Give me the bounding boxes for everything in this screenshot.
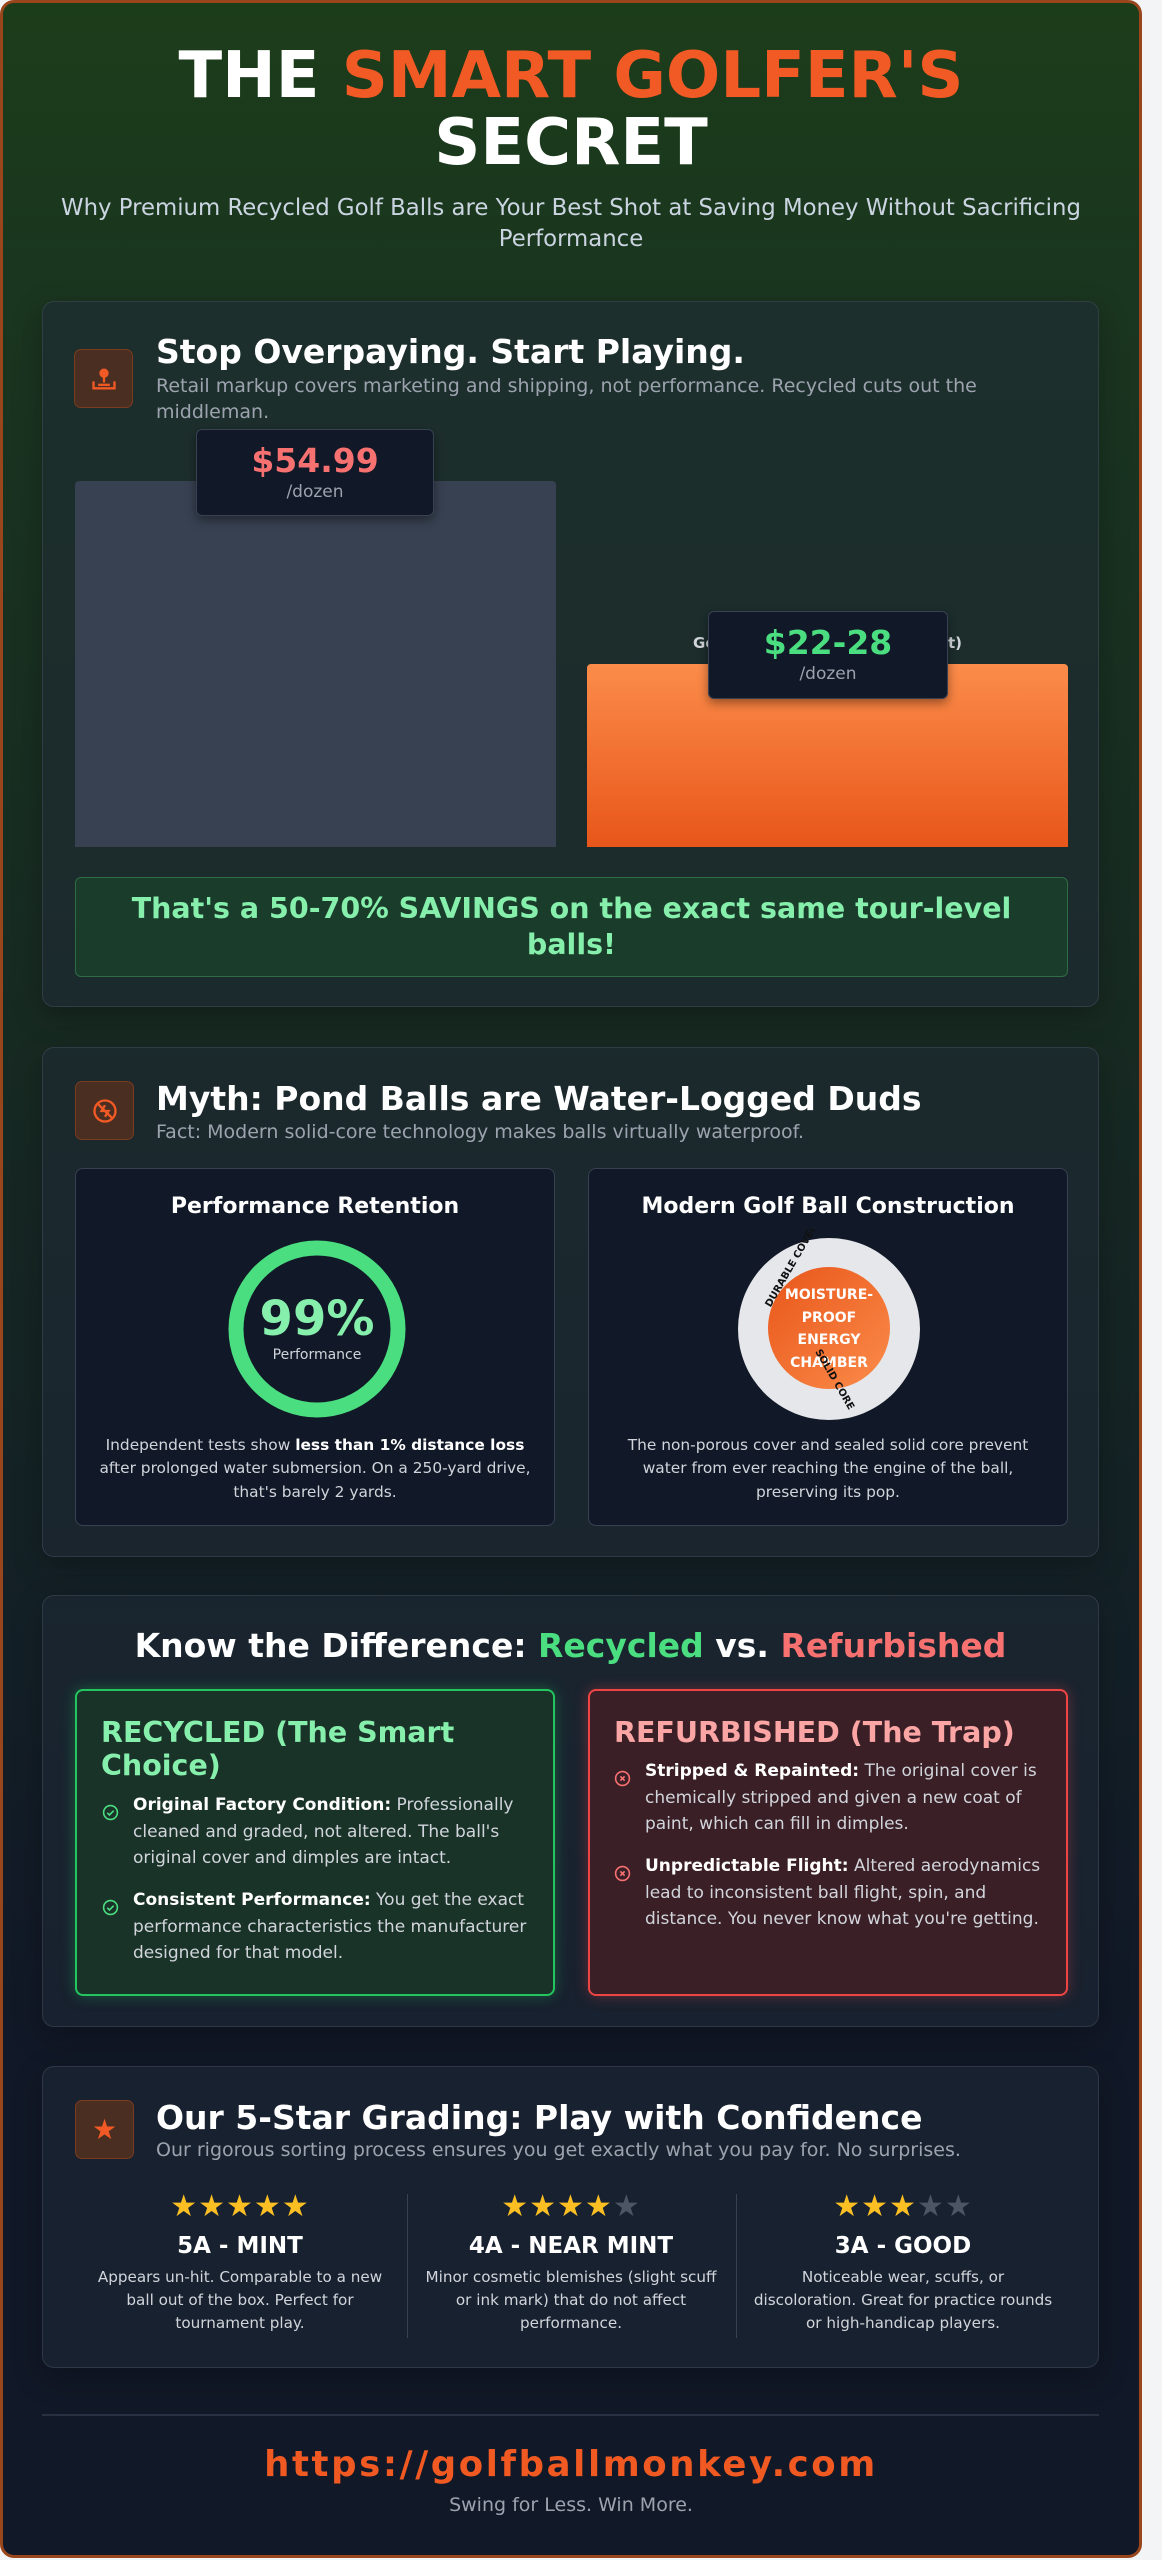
chart: 99% ring [228, 1240, 406, 1418]
footer: tagline: Swing for Less. Win More. [449, 2494, 693, 2516]
icon: star [75, 2100, 134, 2159]
grade: 3A: or high-handicap players. [806, 2314, 1000, 2332]
subheading: middleman. [156, 401, 269, 423]
icon: check [102, 1900, 118, 1916]
grade: 3A: ★★★★★ [833, 2189, 973, 2224]
grade: 3A [754, 2189, 1052, 2332]
card: refurbished [588, 1689, 1068, 1996]
grade: 5A: 5A - MINT [177, 2233, 303, 2259]
grade: 4A: or ink mark) that do not affect [456, 2291, 686, 2309]
title: SECRET [434, 106, 708, 180]
icon: money tray [74, 349, 133, 408]
subheading: Retail markup covers marketing and shipping, not performance. Recycled cuts out the [156, 375, 977, 397]
card: performance retention: after prolonged water submersion. On a 250-yard drive, [100, 1459, 530, 1477]
price tag: recycled: $22-28 [764, 623, 892, 662]
panel: grading [42, 2066, 1099, 2368]
card: ball construction [588, 1168, 1068, 1526]
card: recycled: Consistent Performance: You get the exact [133, 1890, 524, 1910]
icon: x [614, 1770, 630, 1786]
panel: recycled vs refurbished [42, 1595, 1099, 2027]
diagram: golf ball layers: CHAMBER [790, 1355, 868, 1371]
grade: 4A: 4A - NEAR MINT [469, 2233, 673, 2259]
bar label: recycled: GolfBallMonkey (Recycled Mint) [693, 634, 962, 652]
card: refurbished: Stripped & Repainted: The original cover is [645, 1761, 1037, 1781]
subtitle [61, 195, 1081, 252]
card: ball construction: The non-porous cover and sealed solid core prevent [628, 1436, 1028, 1454]
card: refurbished: chemically stripped and given a new coat of [645, 1788, 1022, 1808]
card: refurbished: lead to inconsistent ball flight, spin, and [645, 1882, 986, 1902]
diagram: golf ball layers: MOISTURE- [785, 1287, 873, 1303]
diagram: golf ball layers: ENERGY [798, 1332, 861, 1348]
price tag: retail: /dozen [286, 482, 344, 502]
grade: 5A: ★★★★★ [170, 2189, 310, 2224]
heading: Myth: Pond Balls are Water-Logged Duds [156, 1079, 922, 1118]
subtitle: Why Premium Recycled Golf Balls are Your Best Shot at Saving Money Without Sacrificing [61, 195, 1081, 221]
grade: 5A [98, 2189, 382, 2332]
icon: check [102, 1804, 118, 1820]
bar label: retail: Retail (New) [263, 448, 368, 466]
card: recycled: cleaned and graded, not altered. The ball's [133, 1822, 499, 1842]
grade: 3A: Noticeable wear, scuffs, or [802, 2268, 1004, 2286]
heading: Stop Overpaying. Start Playing. [156, 332, 745, 371]
card: ball construction: preserving its pop. [756, 1483, 900, 1501]
card: recycled: original cover and dimples are intact. [133, 1848, 451, 1868]
card: performance retention [75, 1168, 555, 1526]
chart: 99% ring: 99% [260, 1291, 374, 1347]
subheading: Our rigorous sorting process ensures you get exactly what you pay for. No surprises. [156, 2139, 961, 2161]
card: recycled: RECYCLED (The Smart [101, 1716, 454, 1749]
price tag: retail: $54.99 [251, 441, 379, 480]
chart: 99% ring: Performance [273, 1347, 361, 1363]
grade: 5A: ball out of the box. Perfect for [126, 2291, 354, 2309]
footer: url: https://golfballmonkey.com [264, 2444, 878, 2485]
card: refurbished: distance. You never know what you're getting. [645, 1909, 1039, 1929]
card: refurbished: REFURBISHED (The Trap) [614, 1716, 1015, 1749]
grade: 4A: performance. [520, 2314, 622, 2332]
card: refurbished: Unpredictable Flight: Altered aerodynamics [645, 1856, 1040, 1876]
bar: recycled [587, 664, 1068, 847]
grade: 5A: tournament play. [175, 2314, 305, 2332]
card: performance retention: Independent tests show less than 1% distance loss [106, 1436, 524, 1454]
subheading [156, 375, 977, 423]
subheading: Fact: Modern solid-core technology makes balls virtually waterproof. [156, 1121, 804, 1143]
grade: 4A: ★★★★★ [501, 2189, 641, 2224]
card: recycled: designed for that model. [133, 1943, 343, 1963]
icon: star: ★ [92, 2113, 117, 2146]
grade: 3A: discoloration. Great for practice rounds [754, 2291, 1052, 2309]
subtitle: Performance [499, 226, 643, 252]
callout: savings: balls! [527, 928, 616, 961]
heading: Know the Difference: Recycled vs. Refurbished [135, 1626, 1006, 1665]
price tag: recycled: /dozen [799, 664, 857, 684]
panel: myth [42, 1047, 1099, 1557]
card: performance retention: Performance Retention [171, 1194, 459, 1219]
panel: price comparison [42, 301, 1099, 1007]
heading: Our 5-Star Grading: Play with Confidence [156, 2098, 922, 2137]
card: refurbished: paint, which can fill in dimples. [645, 1814, 909, 1834]
icon: x [614, 1866, 630, 1882]
diagram: golf ball layers [738, 1229, 920, 1420]
callout: savings [75, 877, 1068, 977]
grade: 3A: 3A - GOOD [835, 2233, 971, 2259]
diagram: golf ball layers: PROOF [802, 1310, 856, 1326]
card: performance retention: that's barely 2 yards. [233, 1483, 397, 1501]
diagram: golf ball layers: SOLID CORE [812, 1348, 856, 1412]
card: recycled: Choice) [101, 1749, 221, 1782]
title [178, 39, 964, 180]
card: ball construction: water from ever reaching the engine of the ball, [643, 1459, 1013, 1477]
card: recycled [75, 1689, 555, 1996]
bar: retail [75, 481, 556, 847]
grade: 5A: Appears un-hit. Comparable to a new [98, 2268, 382, 2286]
card: recycled: performance characteristics the manufacturer [133, 1916, 526, 1936]
icon: no water [75, 1081, 134, 1140]
card: recycled: Original Factory Condition: Professionally [133, 1795, 513, 1815]
callout: savings: That's a 50-70% SAVINGS on the exact same tour-level [132, 892, 1011, 925]
grade: 4A [426, 2189, 717, 2332]
title: THE SMART GOLFER'S [178, 39, 964, 113]
price tag: retail [196, 429, 434, 516]
price tag: recycled [708, 611, 948, 699]
grade: 4A: Minor cosmetic blemishes (slight scuff [426, 2268, 716, 2286]
card: ball construction: Modern Golf Ball Construction [641, 1194, 1015, 1219]
